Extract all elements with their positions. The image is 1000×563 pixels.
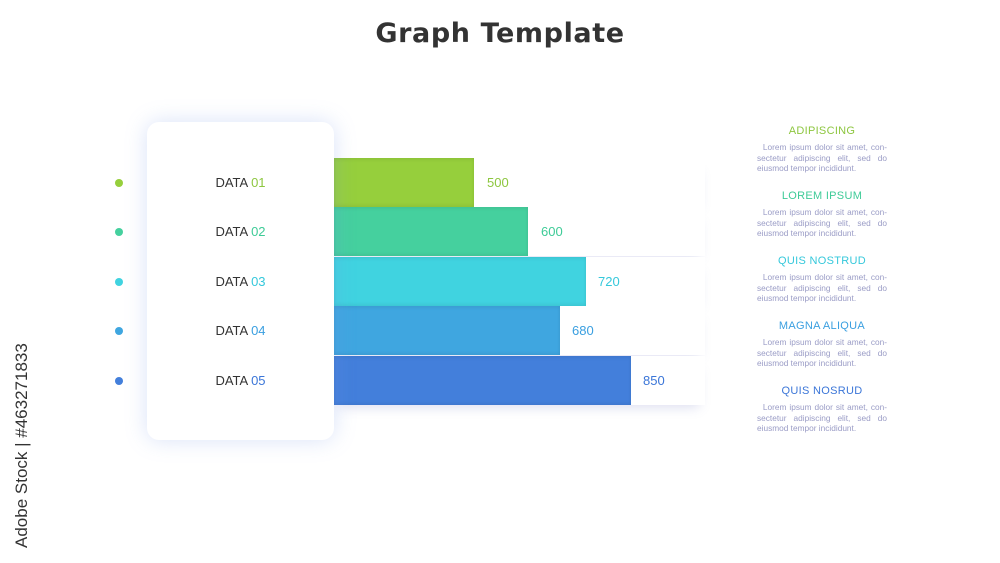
text: DATA 01 (215, 175, 266, 190)
label card (147, 122, 334, 440)
item 2: sectetur adipiscing elit, sed do (757, 218, 887, 228)
item 2 (757, 190, 887, 238)
text: DATA 05 (215, 373, 266, 388)
item 4: sectetur adipiscing elit, sed do (757, 348, 887, 358)
bar chart: 850 (643, 373, 665, 388)
item 2: Lorem ipsum dolor sit amet, con- (763, 207, 887, 217)
item 2: LOREM IPSUM (782, 190, 862, 202)
descriptions (757, 125, 887, 433)
text: DATA 03 (215, 274, 266, 289)
item 5: QUIS NOSRUD (782, 385, 862, 397)
item 3: sectetur adipiscing elit, sed do (757, 282, 887, 292)
item 3: QUIS NOSTRUD (778, 255, 866, 267)
values (487, 175, 665, 388)
text: DATA 04 (215, 323, 266, 338)
bar chart: 680 (572, 323, 594, 338)
dots (115, 179, 123, 385)
text: DATA 02 (215, 224, 266, 239)
item 4: Lorem ipsum dolor sit amet, con- (763, 337, 887, 347)
item 5: Lorem ipsum dolor sit amet, con- (763, 402, 887, 412)
item 2: eiusmod tempor incididunt. (757, 228, 856, 238)
item 5: eiusmod tempor incididunt. (757, 423, 856, 433)
bar 2 (334, 207, 528, 256)
item 3 (757, 255, 887, 303)
bar 4 (334, 306, 560, 355)
bar 3 (334, 257, 586, 306)
item 4: MAGNA ALIQUA (779, 320, 865, 332)
item 5 (757, 385, 887, 433)
bar 5 (334, 356, 631, 405)
bar chart: 600 (541, 224, 563, 239)
bar 1 (334, 158, 474, 207)
item 4 (757, 320, 887, 368)
bar chart: 500 (487, 175, 509, 190)
watermark: vertical: Adobe Stock | #463271833 (12, 343, 31, 548)
item 1: sectetur adipiscing elit, sed do (757, 152, 887, 162)
item 3: eiusmod tempor incididunt. (757, 293, 856, 303)
bar chart: 720 (598, 274, 620, 289)
item 4: eiusmod tempor incididunt. (757, 358, 856, 368)
item 1: eiusmod tempor incididunt. (757, 163, 856, 173)
item 1 (757, 125, 887, 173)
item 1: Lorem ipsum dolor sit amet, con- (763, 142, 887, 152)
item 1: ADIPISCING (789, 125, 855, 137)
data labels (215, 175, 266, 388)
item 3: Lorem ipsum dolor sit amet, con- (763, 272, 887, 282)
item 5: sectetur adipiscing elit, sed do (757, 412, 887, 422)
title: Graph Template (375, 18, 625, 49)
